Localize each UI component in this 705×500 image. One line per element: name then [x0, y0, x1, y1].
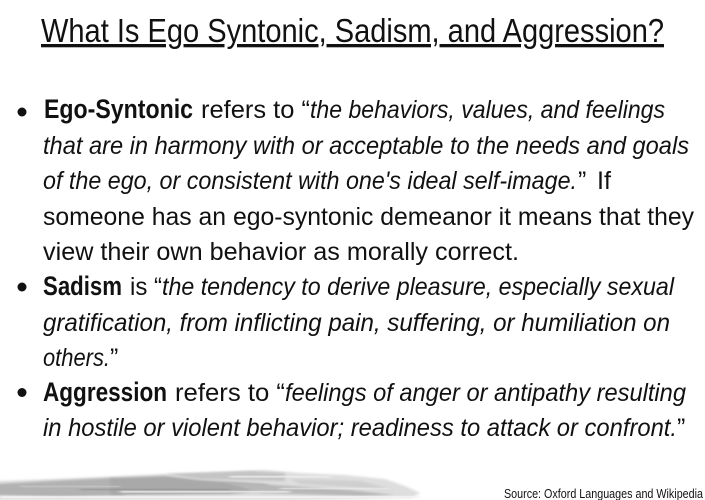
- line 1: refers to “: [201, 96, 310, 124]
- line 5: view their own behavior as morally correct.: [43, 238, 519, 266]
- line 6: the tendency to derive pleasure, especially sexual: [162, 273, 675, 301]
- bullet: Sadism: [18, 282, 26, 292]
- text block: Sadism definition: [18, 271, 675, 372]
- line 10: in hostile or violent behavior; readiness to attack or confront.: [43, 414, 677, 442]
- line 9: refers to “: [175, 379, 285, 407]
- text block: Ego-Syntonic definition: [18, 94, 694, 266]
- term: Ego-Syntonic: Ego-Syntonic: [44, 94, 193, 124]
- line 3: If: [597, 167, 611, 195]
- line 8: others.: [43, 344, 110, 372]
- line 6: is “: [130, 273, 162, 301]
- line 9: feelings of anger or antipathy resulting: [285, 379, 686, 407]
- bullet: Ego-Syntonic: [18, 108, 26, 116]
- line 3: ”: [578, 167, 586, 195]
- line 3: of the ego, or consistent with one's ideal self-image.: [43, 167, 577, 195]
- line 8: ”: [110, 344, 118, 372]
- line 4: someone has an ego-syntonic demeanor it means that they: [43, 203, 694, 231]
- line 7: gratification, from inflicting pain, suffering, or humiliation on: [43, 309, 670, 337]
- bullet: Aggression: [18, 388, 26, 397]
- term: Aggression: Aggression: [43, 377, 167, 407]
- line 10: ”: [677, 414, 685, 442]
- brush stroke decoration: [0, 470, 420, 500]
- line 1: the behaviors, values, and feelings: [310, 96, 665, 124]
- text block: Aggression definition: [18, 377, 686, 442]
- term: Sadism: Sadism: [43, 271, 122, 301]
